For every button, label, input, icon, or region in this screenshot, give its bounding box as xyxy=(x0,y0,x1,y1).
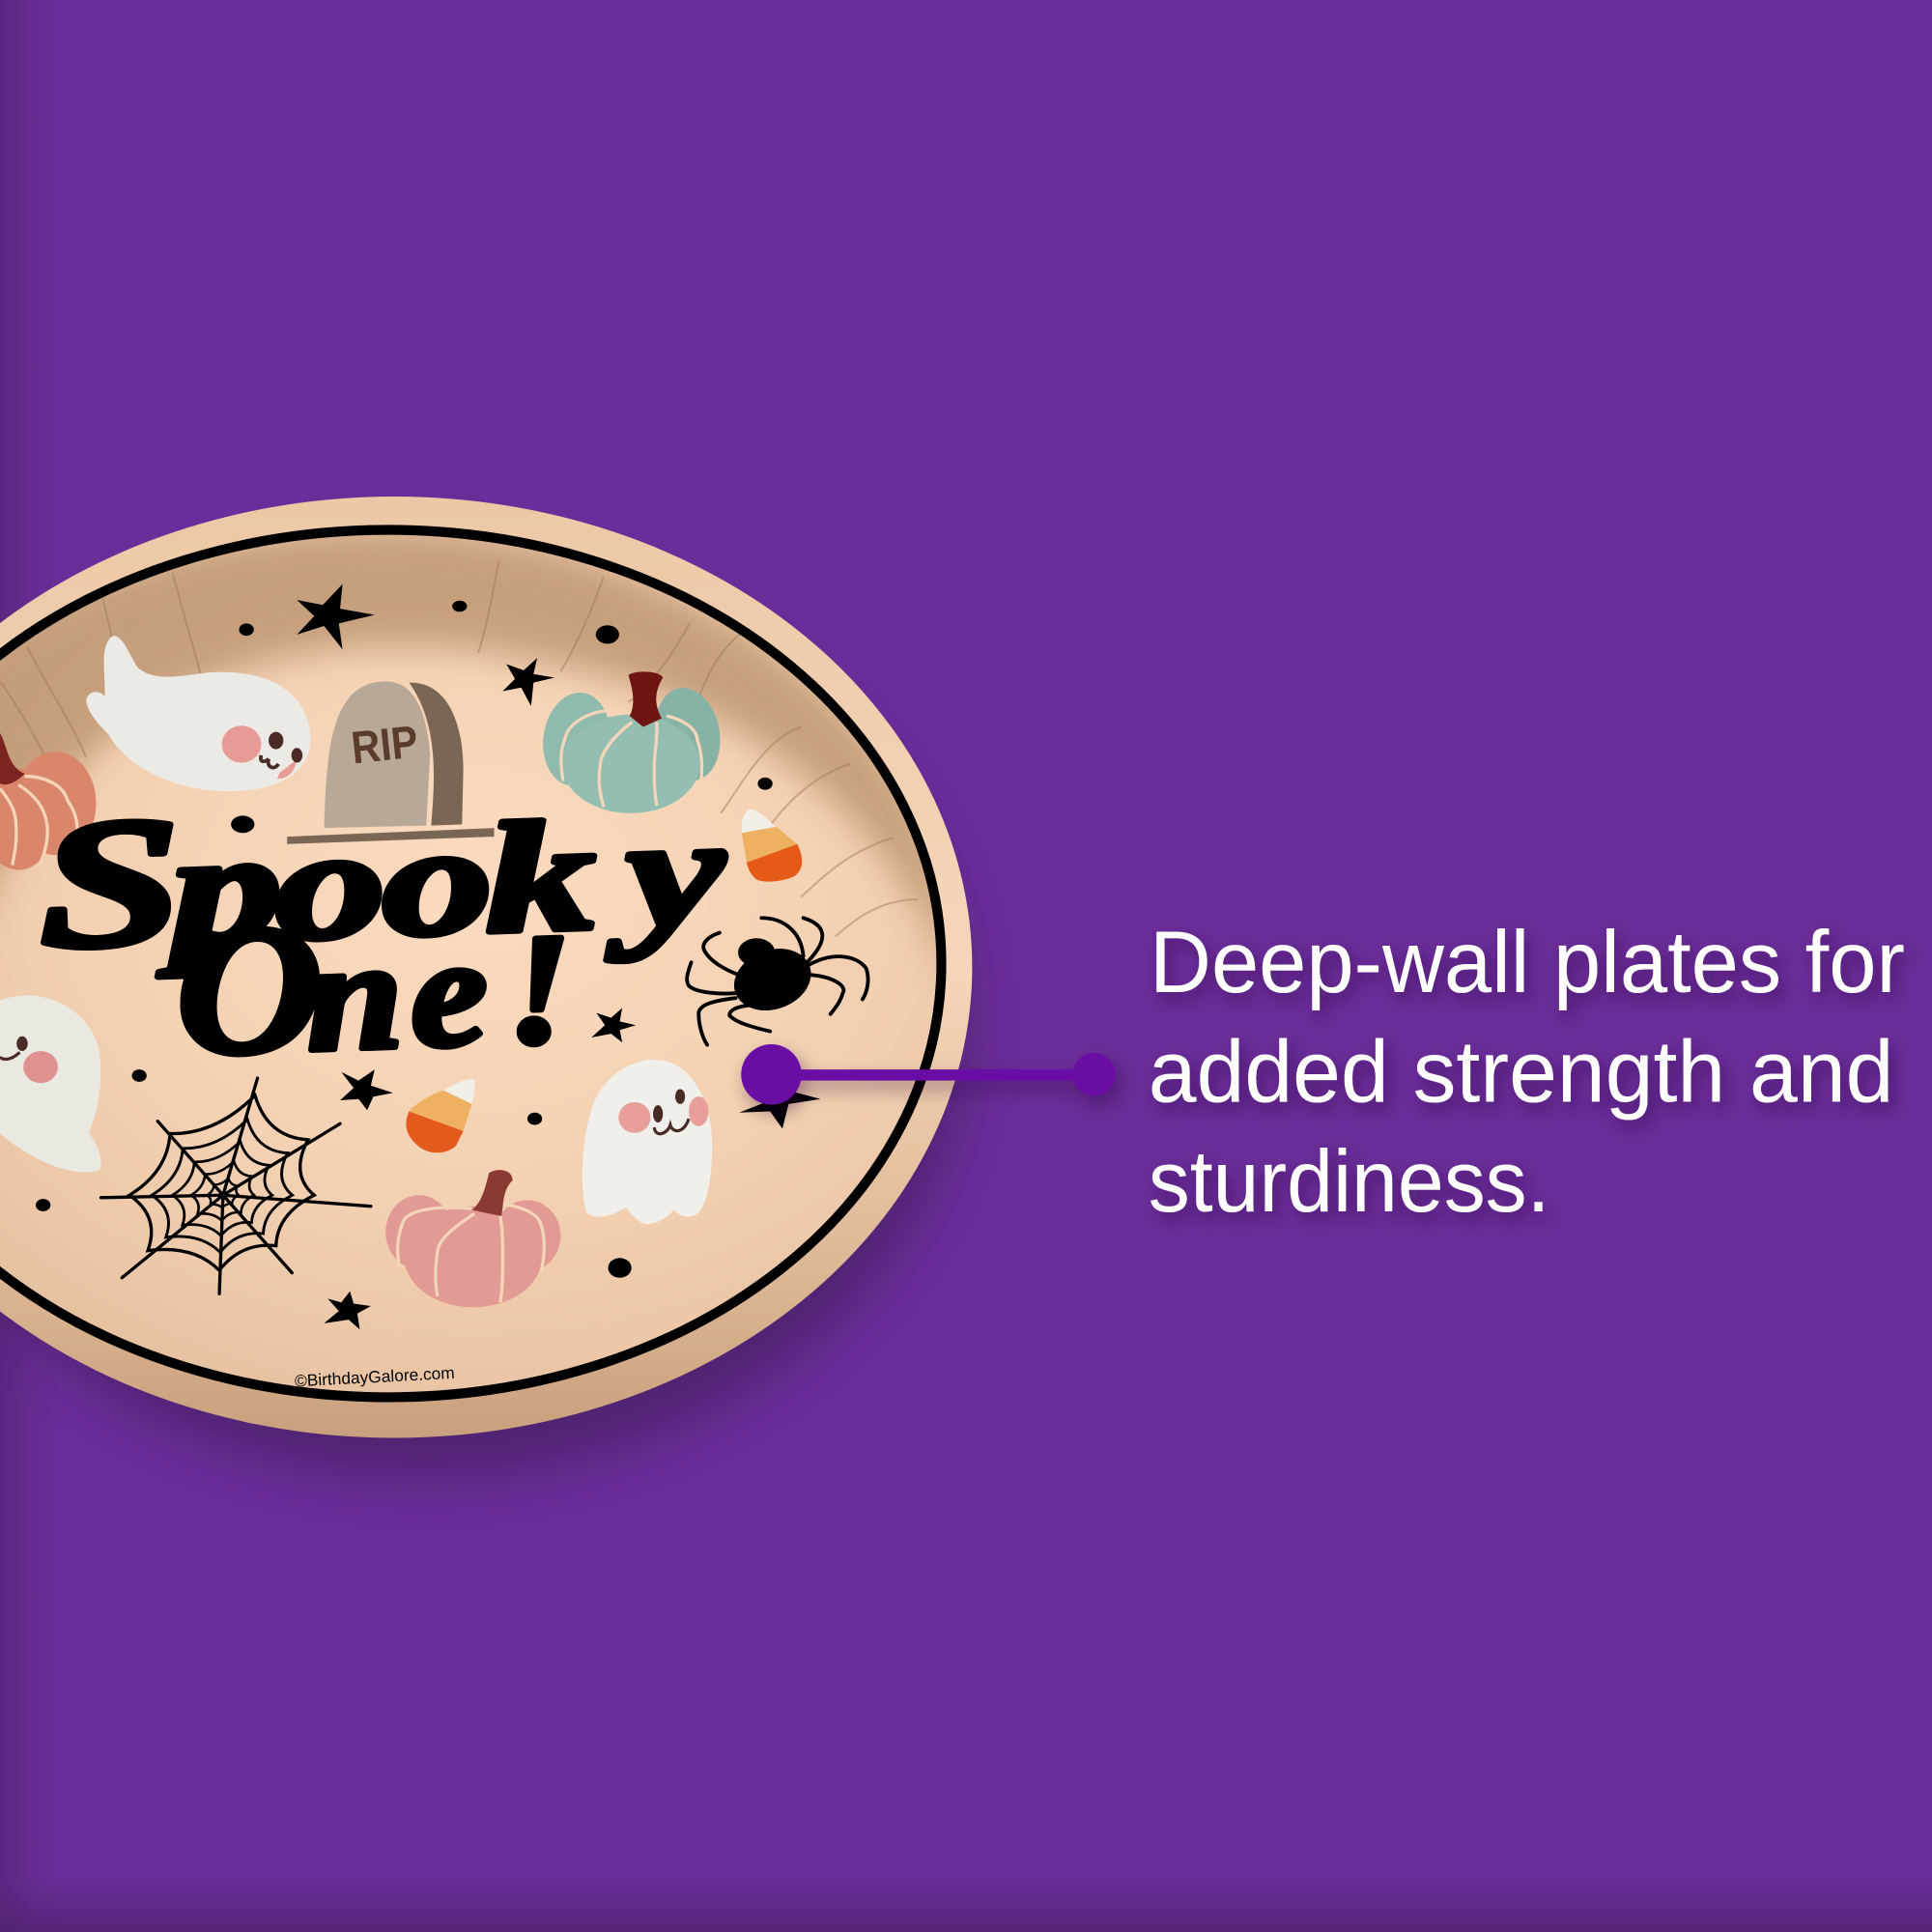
tombstone xyxy=(287,681,494,844)
plate face xyxy=(0,529,941,1397)
teal pumpkin xyxy=(537,683,727,813)
RIP text: RIP xyxy=(349,717,420,774)
callout text: added strength and xyxy=(1149,1023,1893,1121)
spider xyxy=(687,918,868,1045)
flying ghost xyxy=(86,636,311,791)
stars xyxy=(297,584,820,1329)
callout text: sturdiness. xyxy=(1149,1133,1550,1231)
teal pumpkin stem xyxy=(629,671,663,727)
spooky headline: One! xyxy=(172,876,576,1094)
plate xyxy=(0,497,972,1479)
candy corn bottom xyxy=(406,1079,475,1152)
callout connector xyxy=(741,1044,1116,1104)
left ghost xyxy=(0,996,101,1172)
callout start dot xyxy=(741,1044,802,1104)
plate rim xyxy=(0,497,972,1438)
pink pumpkin xyxy=(385,1195,560,1307)
pink pumpkin stem xyxy=(472,1170,513,1216)
candy corn top xyxy=(742,810,802,882)
copyright text: ©BirthdayGalore.com xyxy=(295,1363,455,1390)
callout text xyxy=(1149,914,1905,1231)
salmon pumpkin stem xyxy=(0,733,25,784)
right ghost xyxy=(582,1060,712,1224)
spider web xyxy=(101,1078,371,1293)
salmon pumpkin xyxy=(0,752,96,870)
plate shadow xyxy=(0,567,967,1479)
callout end dot xyxy=(1072,1053,1116,1096)
dots xyxy=(36,601,773,1278)
spooky headline xyxy=(35,760,728,1094)
callout text: Deep-wall plates for xyxy=(1150,914,1905,1011)
spooky headline: Spooky xyxy=(35,760,728,988)
wall shading xyxy=(0,535,937,970)
black ring xyxy=(0,529,941,1397)
